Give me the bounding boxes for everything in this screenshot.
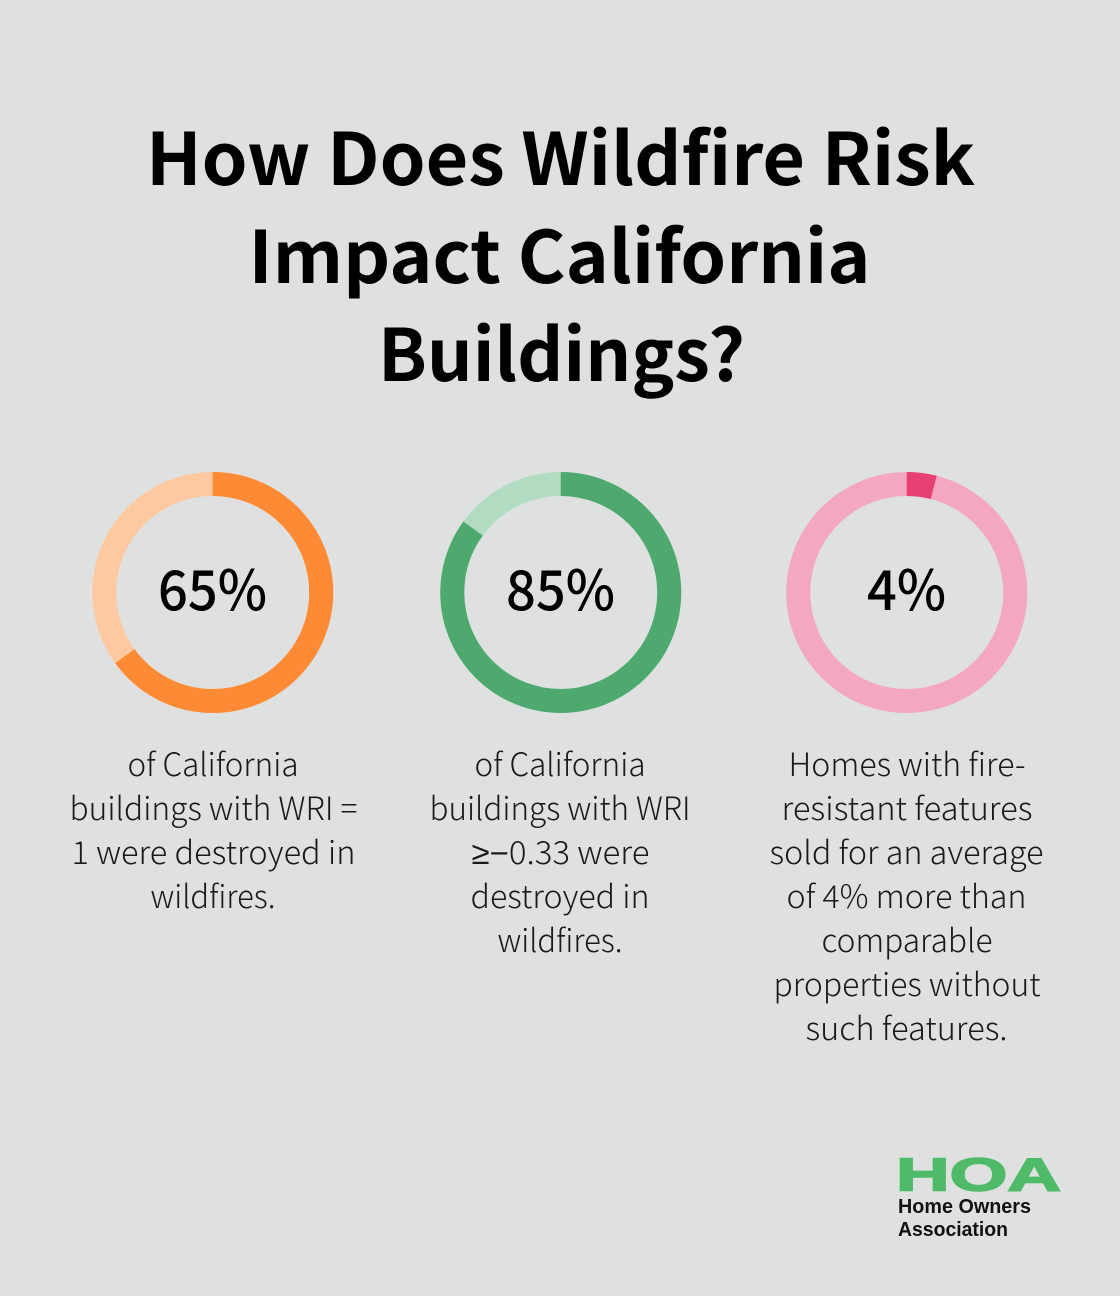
panel: 65% statistic xyxy=(70,484,358,918)
description: 4% statistic xyxy=(770,740,1044,1050)
value: 4%: 4% xyxy=(867,546,946,626)
description: 4% statistic: comparable xyxy=(822,916,992,962)
donut chart: 4% xyxy=(798,484,1015,701)
logo: Home Owners Association xyxy=(896,1148,1061,1241)
description: 65% statistic: wildfires. xyxy=(150,872,276,918)
description: 85% statistic: of California xyxy=(474,740,646,786)
value: 65%: 65% xyxy=(158,546,267,626)
description: 4% statistic: resistant features xyxy=(782,784,1032,830)
description: 85% statistic: buildings with WRI xyxy=(430,784,690,830)
description: 65% statistic: of California xyxy=(128,740,298,786)
description: 4% statistic: such features. xyxy=(806,1004,1008,1050)
description: 4% statistic: properties without xyxy=(774,960,1040,1006)
description: 65% statistic: buildings with WRI = xyxy=(70,784,358,830)
panel: 85% statistic xyxy=(430,484,690,962)
description: 85% statistic xyxy=(430,740,690,962)
description: 85% statistic: destroyed in xyxy=(470,872,650,918)
description: 4% statistic: sold for an average xyxy=(770,828,1044,874)
description: 4% statistic: of 4% more than xyxy=(786,872,1026,918)
logo: Home Owners Association: Association xyxy=(898,1219,1008,1241)
title: How Does Wildfire Risk xyxy=(146,101,976,206)
description: 85% statistic: wildfires. xyxy=(498,916,622,962)
description: 4% statistic: Homes with fire- xyxy=(788,740,1026,786)
value: 85%: 85% xyxy=(506,546,615,626)
panel: 4% statistic xyxy=(770,484,1044,1050)
title: Buildings? xyxy=(378,297,745,402)
donut chart: 65% xyxy=(104,484,321,701)
title: Impact California xyxy=(248,199,870,304)
description: 65% statistic: 1 were destroyed in xyxy=(72,828,356,874)
logo: Home Owners Association: HOA xyxy=(896,1148,1061,1200)
logo: Home Owners Association: Home Owners xyxy=(898,1196,1031,1218)
description: 85% statistic: ≥−0.33 were xyxy=(472,828,650,874)
description: 65% statistic xyxy=(70,740,358,918)
donut chart: 85% xyxy=(452,484,669,701)
title xyxy=(146,101,976,402)
